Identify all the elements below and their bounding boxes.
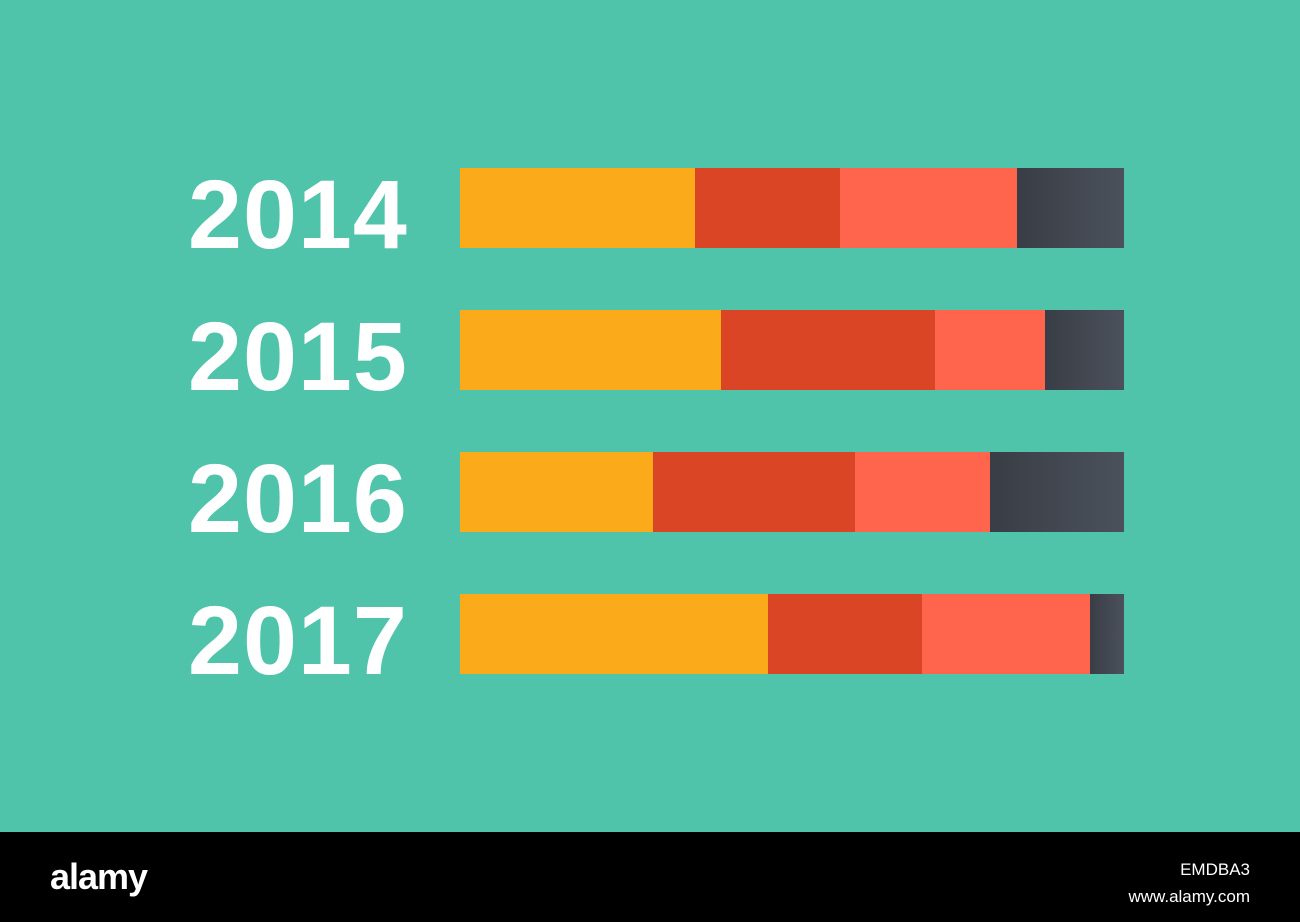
footer id text: EMDBA3 <box>1180 860 1250 879</box>
footer id text <box>1128 860 1250 906</box>
footer id text: www.alamy.com <box>1128 887 1250 906</box>
label 2016: 2016 <box>188 444 408 553</box>
footer <box>0 832 1300 922</box>
bar 2017 <box>460 594 1124 674</box>
label 2015: 2015 <box>188 302 408 411</box>
bar 2014 <box>460 168 1124 248</box>
footer logo: alamy <box>50 856 147 897</box>
bar 2016 <box>460 452 1124 532</box>
label 2017: 2017 <box>188 586 408 695</box>
label 2014: 2014 <box>188 160 408 269</box>
bar 2015 <box>460 310 1124 390</box>
